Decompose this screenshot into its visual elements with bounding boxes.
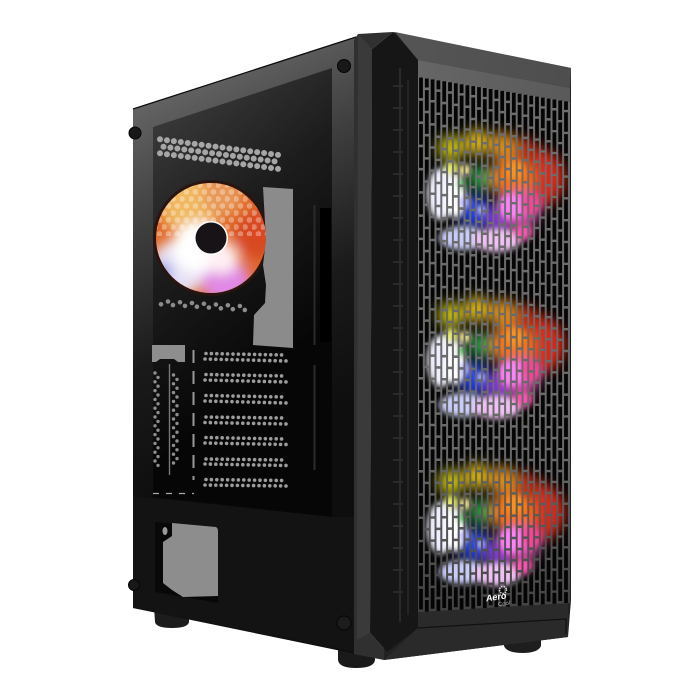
glass screw top right [338, 60, 350, 72]
PC case product image [128, 32, 571, 668]
chamfered dark face [370, 32, 418, 652]
glass screw top left [129, 127, 141, 139]
interior right rails [314, 205, 326, 470]
logo: Aero [484, 591, 507, 603]
grey motherboard plate [253, 187, 293, 348]
PSU window [155, 522, 218, 603]
right foot [504, 638, 541, 653]
logo: Cool [498, 601, 511, 608]
glass screw bottom right [337, 616, 351, 630]
fans behind mesh [419, 78, 568, 612]
front mesh [418, 76, 570, 612]
vent below fan [161, 302, 245, 310]
side glass panel [133, 37, 356, 654]
fan hub [194, 221, 228, 255]
top band [395, 32, 571, 88]
front bezel [384, 32, 571, 660]
rear foot [154, 606, 189, 628]
top edge line [133, 37, 356, 109]
lower top band [418, 60, 570, 102]
glass screw bottom left [128, 580, 140, 590]
vertical slot bracket [152, 345, 194, 494]
expansion slot vents [205, 354, 287, 486]
centre metal strip [354, 32, 393, 660]
lower shroud [133, 496, 354, 652]
strip highlight [357, 34, 372, 640]
logo [484, 586, 511, 610]
front foot [338, 645, 375, 668]
bottom band [384, 603, 568, 660]
bottom band line [418, 619, 566, 634]
honeycomb vent [160, 139, 279, 169]
case interior [153, 68, 332, 517]
rear fan [153, 180, 266, 296]
chamfer grid [398, 68, 408, 622]
